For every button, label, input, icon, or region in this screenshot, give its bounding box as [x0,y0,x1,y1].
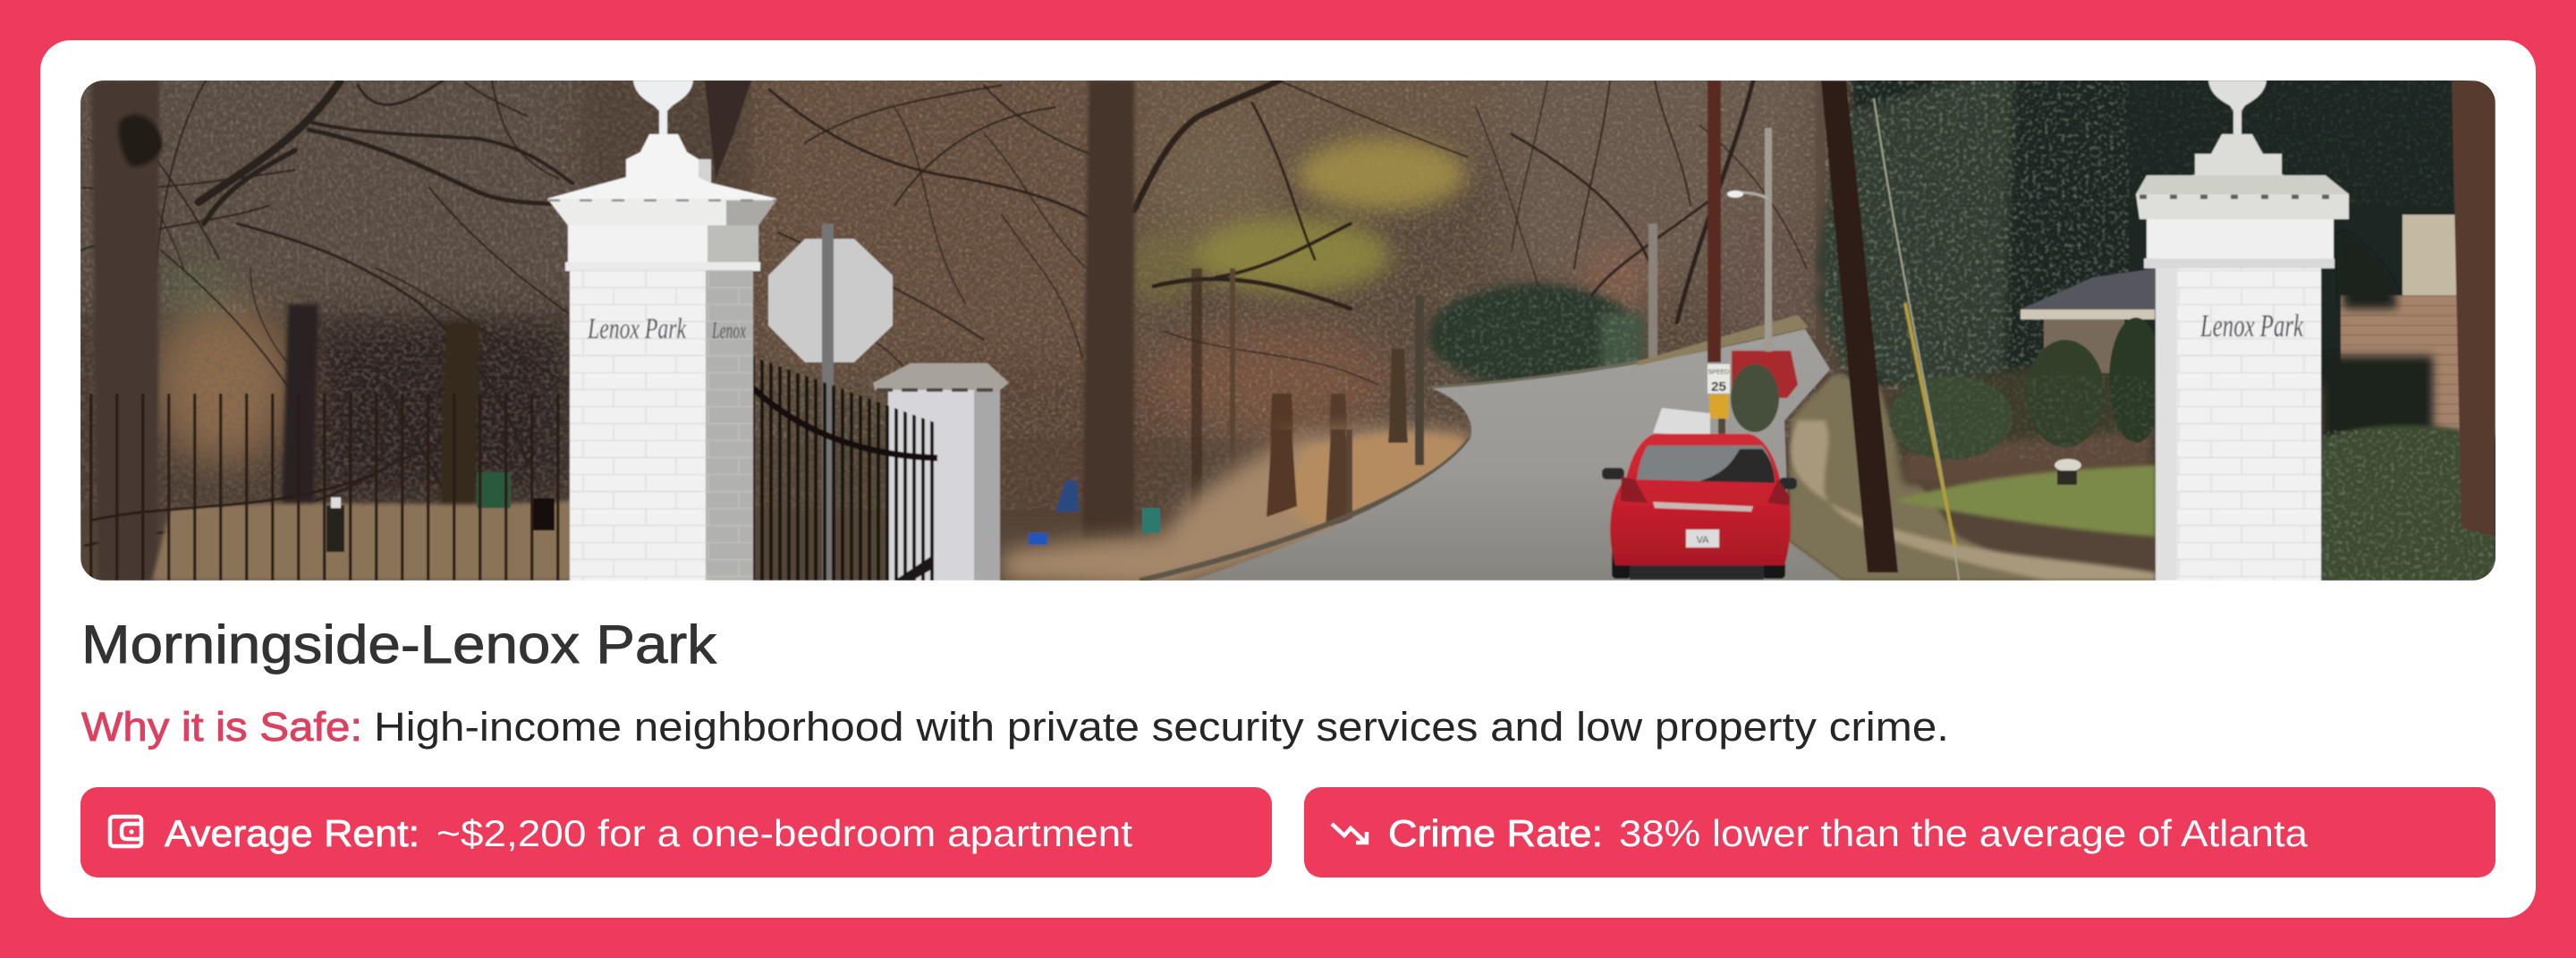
bare branches, left [80,81,1109,546]
utility poles and street light [1707,81,1959,581]
roadside bush [1731,364,1779,432]
far red car [1732,351,1798,398]
flower planter [2055,459,2081,471]
pillar side inscription: Lenox [711,318,746,343]
speed limit sign: SPEED [1708,369,1729,376]
red car: VA [1697,535,1709,546]
pill: average rent [80,787,1272,877]
right tree trunk [2452,81,2496,537]
description text: High-income neighborhood with private security services and low property crime. [374,704,1949,750]
icon: trending down arrow [1332,824,1367,843]
photo: Lenox Park entrance street scene [54,54,2504,590]
chrome strip and plate [1653,502,1753,512]
soft colour masses of the trees [54,54,1816,510]
right stone pillar [2136,81,2349,581]
wheels [1612,546,1631,579]
speed limit sign: 25 [1711,379,1726,394]
autumn olive-yellow leaf clumps [1127,139,1467,304]
label: Why it is Safe: [81,704,362,750]
foliage grain texture [80,81,1816,510]
small park objects: blue figure, teal bin, blue bag [1029,480,1160,545]
park ground behind the fence [152,472,572,581]
red car [1602,434,1797,580]
speed limit sign [1707,364,1730,438]
mulch slope and curb [998,415,1471,581]
shrubs and house on the right [1889,215,2504,581]
hillside grass [1637,315,1809,366]
pillar inscription: Lenox Park [2199,308,2304,343]
label: Average Rent: [165,812,419,854]
short pillar [873,363,1009,581]
bare branches, centre and right [1134,81,1807,385]
taillights [1621,477,1648,503]
title: Morningside-Lenox Park [81,615,717,674]
why it is safe description [81,704,1949,750]
label: Crime Rate: [1388,812,1603,854]
pillar inscription: Lenox Park [587,313,687,345]
foreground tree bases over the slope [1267,429,1297,517]
far curb of the road [1431,327,1805,387]
mirrors [1602,468,1624,479]
rear window [1637,445,1775,483]
grass and footpath by the road [1787,363,2156,581]
value: 38% lower than the average of Atlanta [1619,812,2309,854]
evergreen leaf speckle [1440,81,2460,394]
value: ~$2,200 for a one-bedroom apartment [436,812,1132,854]
left gate fence [89,394,568,581]
pill: crime rate [1304,787,2496,877]
white vehicle roof behind car [1653,408,1710,437]
body [1610,434,1791,565]
stop sign back [768,224,893,581]
road [1191,329,1843,581]
right gate fence [751,356,937,581]
right side dark evergreen masses [1428,72,2469,394]
left stone pillar [547,81,776,581]
tree trunks [91,81,1657,581]
icon: wallet [110,817,141,846]
